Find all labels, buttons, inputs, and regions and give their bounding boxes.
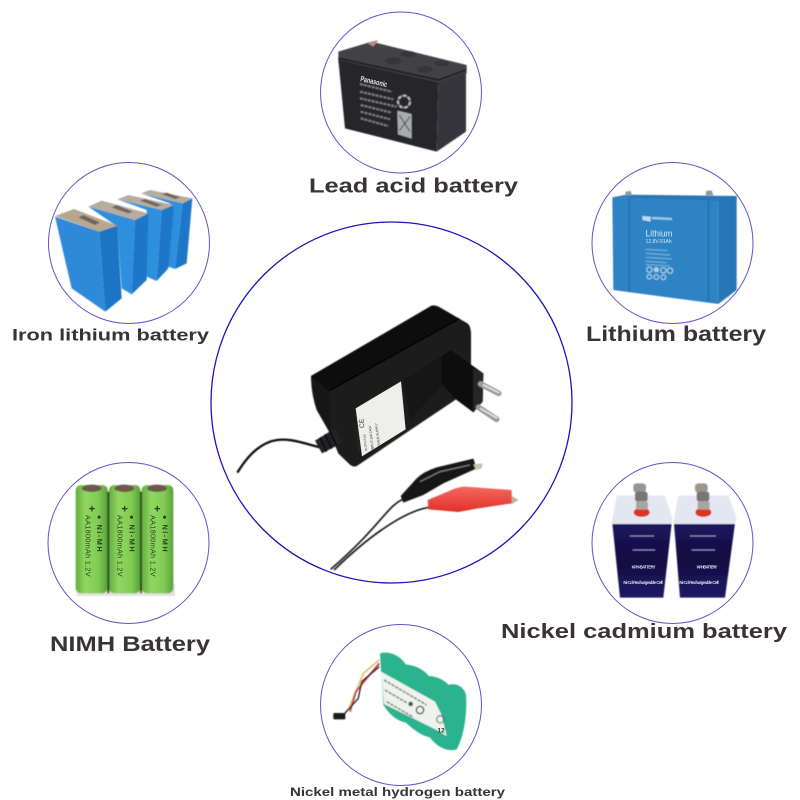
charger circle outline [211,222,572,583]
circle outline [320,624,482,786]
photo: three green AA cells [76,485,175,596]
cell print: Ni-Cd Rechargeable Cell [623,580,663,585]
photo: lead acid battery [338,40,467,152]
cell print: AA1800mAh 1.2V [148,515,157,577]
panel: NiMH battery [48,462,210,656]
charger rating label: OUTPUT:DC [362,433,368,451]
photo: blue lithium battery [612,190,737,304]
charger rating label: POWER SUPPLY [374,422,382,450]
product text: 12,8V-91Ah [646,239,672,245]
panel: lithium battery [586,162,766,346]
photo: charger with clips [237,305,519,570]
product text [646,228,673,245]
charger rating label: INPUT:100-240V [368,424,375,450]
label: Nickel cadmium battery [501,621,788,643]
panel: nickel cadmium battery [501,462,788,643]
brand text: Panasonic [360,74,389,89]
circle outline [48,162,210,324]
cell print: KPH-BATTERY [697,564,717,569]
cell print [83,503,169,577]
cell print [623,564,719,585]
cell print: ● Ni-MH [160,515,169,552]
circle outline [48,462,209,624]
circle outline [592,462,753,624]
charger rating label: CE [358,418,366,428]
panel: charger [211,222,572,583]
cell print: + [121,503,128,515]
cell print: ● Ni-MH [128,515,137,552]
cell print: + [89,503,96,515]
cell print: + [154,503,161,515]
product text: Lithium [646,228,673,238]
label: Lithium battery [586,323,766,346]
cell print: AA1800mAh 1.2V [83,515,92,577]
label: Iron lithium battery [12,326,210,344]
cell print: ● Ni-MH [95,515,104,552]
label: NIMH Battery [50,633,210,656]
cell print: AA1800mAh 1.2V [116,515,125,577]
panel: lead acid battery [309,12,519,198]
panel: nickel metal hydrogen battery [290,624,505,799]
circle outline [320,12,482,173]
charger rating label [354,381,406,456]
cell print: KPH-BATTERY [632,564,656,569]
pack number: 12 [437,728,445,735]
photo: green battery pack with wires [333,653,466,750]
cell print: Ni-Cd Rechargeable Cell [679,580,719,585]
circle outline [592,162,753,324]
panel: iron lithium battery [12,162,210,344]
photo: two dark blue cells [612,483,737,598]
photo: four blue prismatic cells [55,190,192,312]
label: Nickel metal hydrogen battery [290,785,505,799]
label: Lead acid battery [309,176,519,198]
charger rating label: MADE IN CHINA [355,426,362,452]
